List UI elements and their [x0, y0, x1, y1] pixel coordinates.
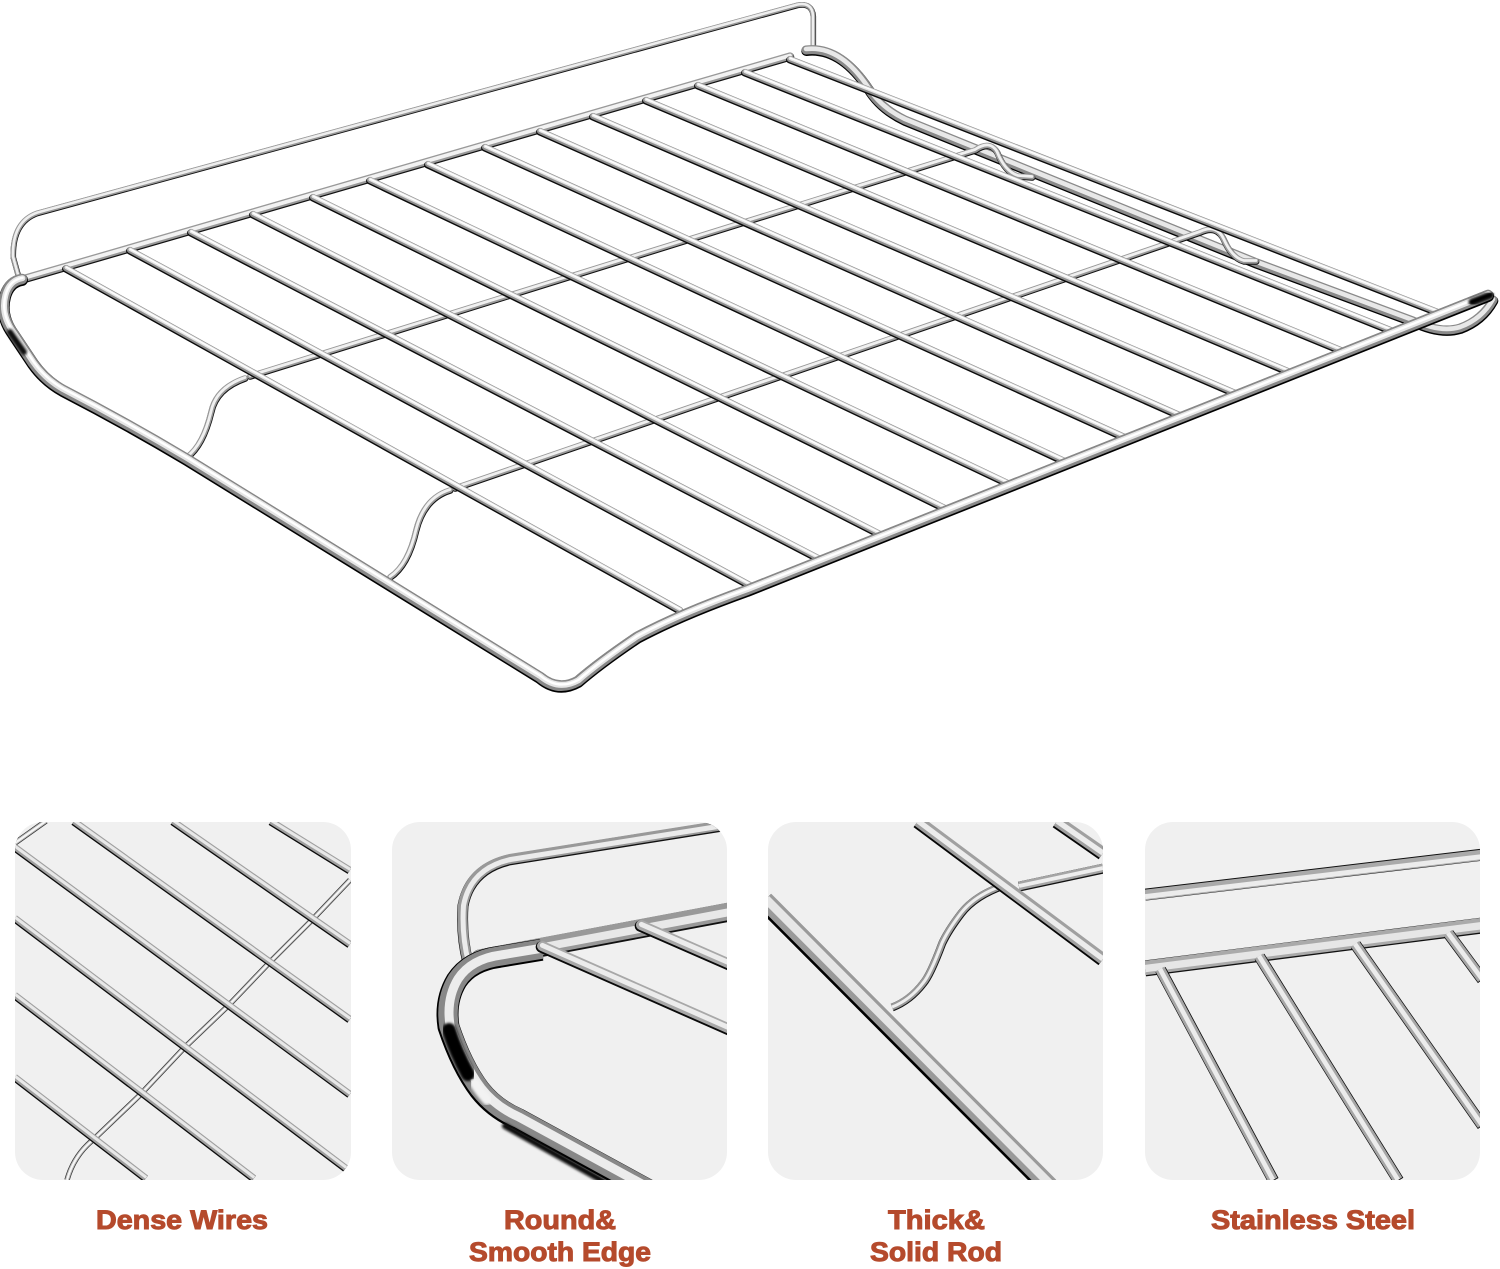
caption: Round and Smooth Edge: Round& [504, 1205, 616, 1235]
caption: Stainless Steel: Stainless Steel [1211, 1205, 1415, 1235]
cross wires with wave bends [187, 145, 1256, 578]
side rail and hook [806, 49, 1493, 331]
main product image: wire oven rack [4, 4, 1493, 687]
close-up wires [15, 820, 350, 1180]
caption: Round and Smooth Edge [469, 1205, 651, 1267]
caption: Round and Smooth Edge: Smooth Edge [469, 1237, 651, 1267]
panel: Thick and Solid Rod [764, 821, 1103, 1187]
panel: Dense Wires [15, 820, 351, 1180]
back cross bar [22, 56, 790, 280]
panel: Stainless Steel [1145, 822, 1482, 1181]
thick outer frame [4, 278, 1490, 687]
caption: Dense Wires: Dense Wires [96, 1205, 268, 1235]
close-up bars [1145, 855, 1482, 1181]
long grid wires [66, 58, 1443, 611]
close-up thick rod [764, 821, 1103, 1187]
panel: Round and Smooth Edge [392, 822, 730, 1191]
caption: Thick and Solid Rod: Solid Rod [870, 1237, 1002, 1267]
caption: Thick and Solid Rod [870, 1205, 1002, 1267]
close-up rounded frame [448, 824, 730, 1191]
back upright rail [13, 4, 813, 276]
caption: Thick and Solid Rod: Thick& [888, 1205, 985, 1235]
